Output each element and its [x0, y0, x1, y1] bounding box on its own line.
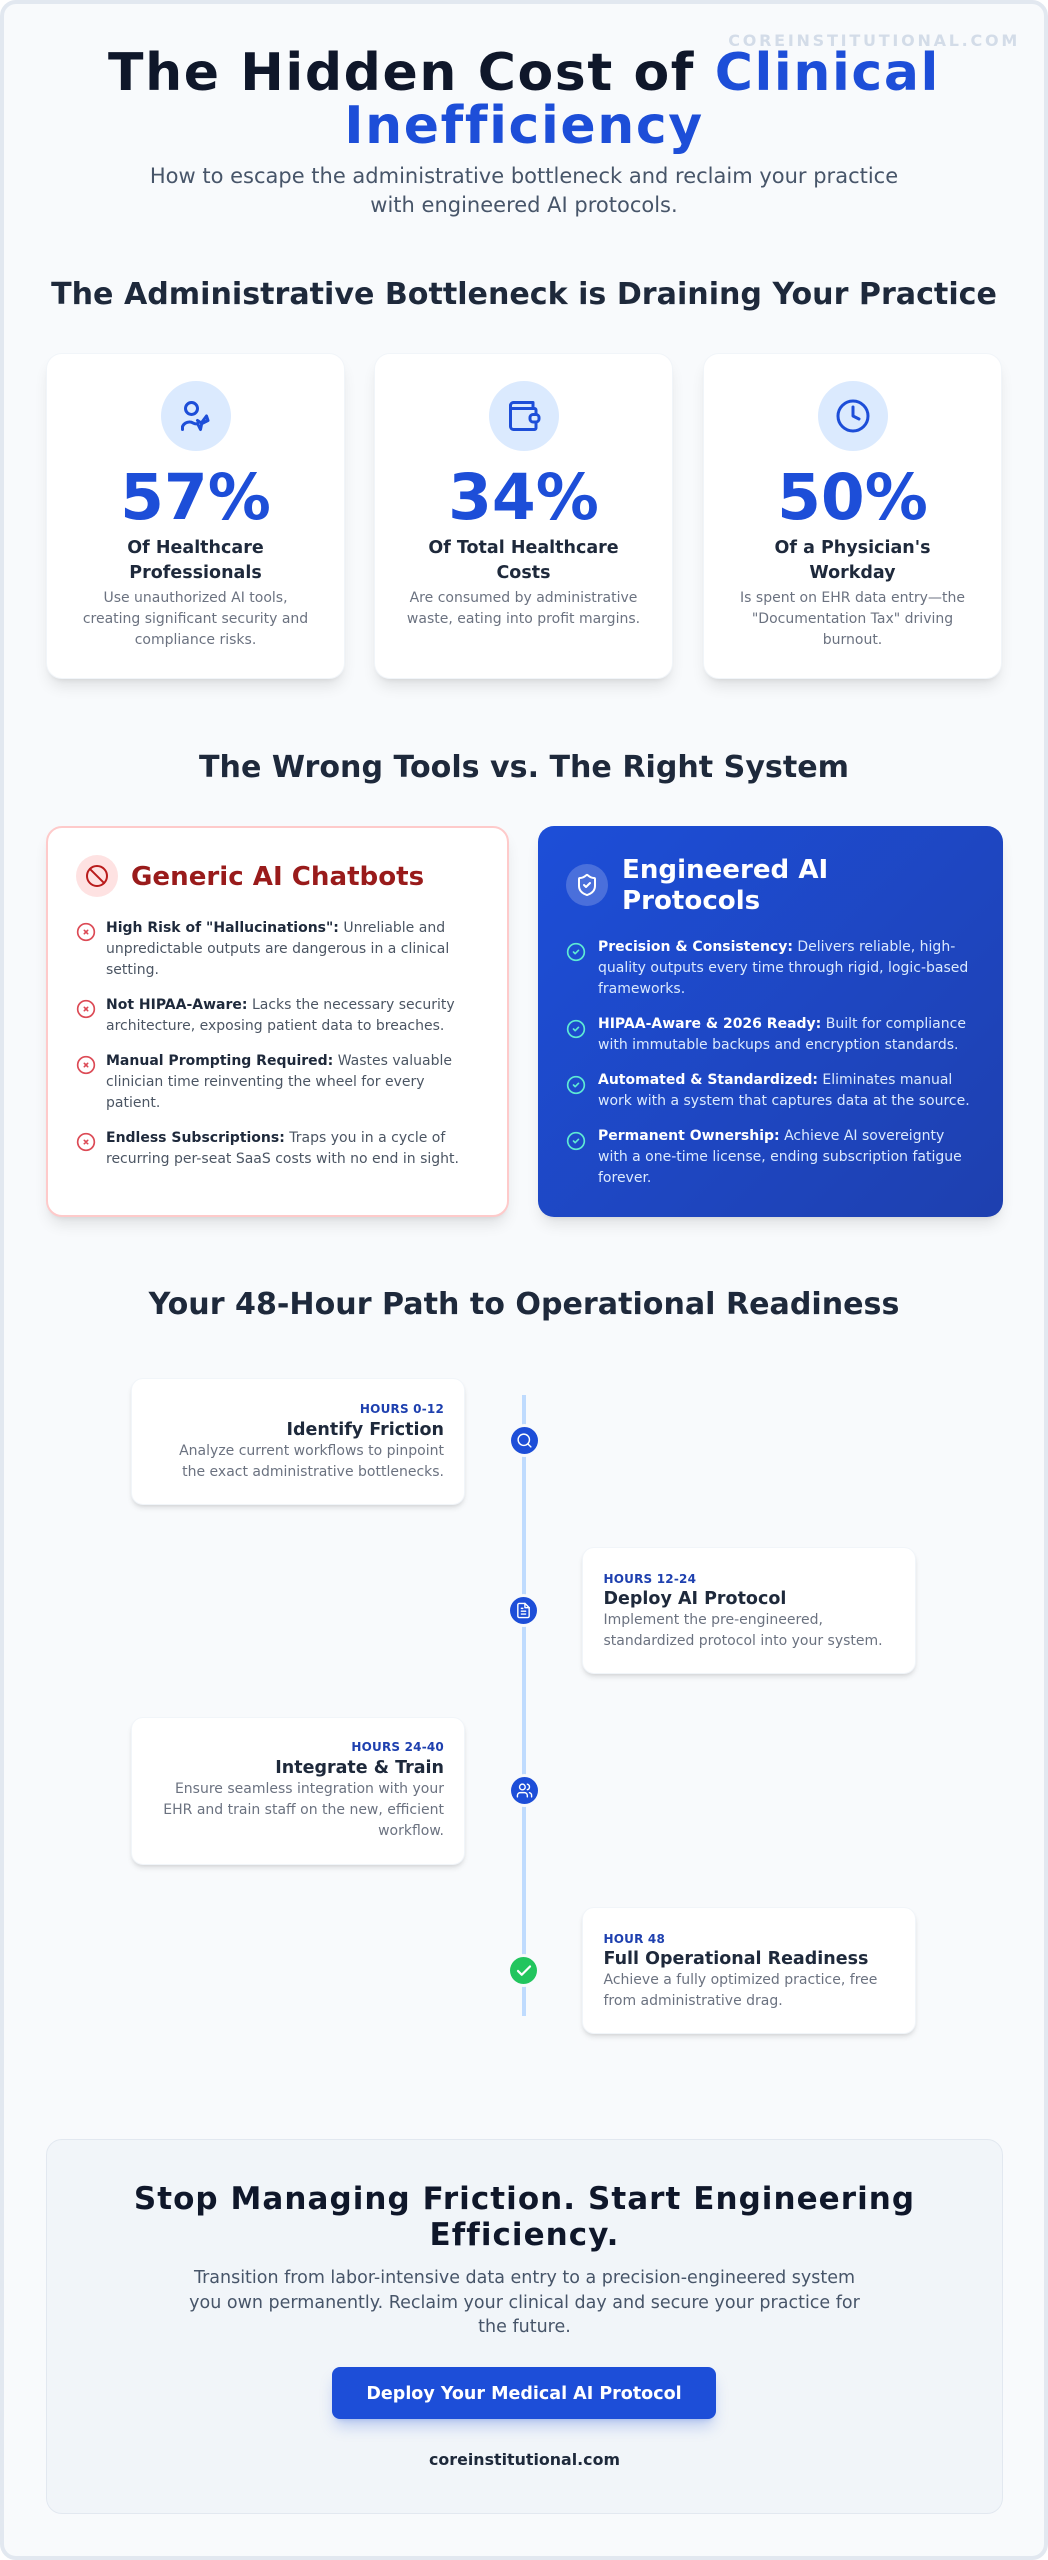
list item: HIPAA: Not HIPAA-Aware: Lacks the necessary security [106, 997, 455, 1013]
timeline card: hours 0-12: the exact administrative bottlenecks. [182, 1464, 444, 1480]
list item: HIPAA ready: HIPAA-Aware & 2026 Ready: Built for compliance [598, 1016, 966, 1032]
list item: hallucinations: unpredictable outputs are dangerous in a clinical [106, 941, 449, 957]
list item: precision [566, 939, 968, 997]
stat description [740, 590, 965, 648]
timeline card: hour 48 [582, 1907, 916, 2034]
timeline card: hours 12-24: HOURS 12-24 [604, 1572, 696, 1586]
stat card: 50% [703, 353, 1002, 679]
CTA text: you own permanently. Reclaim your clinical day and secure your practice for [189, 2292, 860, 2312]
CTA button [332, 2367, 716, 2419]
CTA text [189, 2268, 860, 2337]
step marker: search [511, 1427, 538, 1454]
icon: wallet [489, 381, 559, 451]
list item: subscriptions [76, 1130, 459, 1167]
subtitle [150, 164, 898, 217]
list item: manual prompting: patient. [106, 1095, 160, 1111]
title: Inefficiency [344, 96, 704, 156]
CTA text: Transition from labor-intensive data entry to a precision-engineered system [194, 2268, 855, 2288]
timeline card: hours 12-24: Implement the pre-engineered, [604, 1612, 823, 1628]
timeline card: hours 12-24 [582, 1547, 916, 1674]
step marker: document [510, 1597, 537, 1624]
panel heading: Protocols [622, 886, 760, 916]
panel: call to action [46, 2139, 1003, 2514]
list item: automated: Automated & Standardized: Eliminates manual [598, 1072, 952, 1088]
timeline card: hour 48: Achieve a fully optimized practice, free [604, 1972, 877, 1988]
stat description: "Documentation Tax" driving [752, 611, 953, 627]
stat label: Of a Physician's [774, 538, 930, 558]
timeline card: hour 48: Full Operational Readiness [604, 1949, 868, 1969]
list item: ownership: Permanent Ownership: Achieve AI sovereignty [598, 1128, 944, 1144]
list item: HIPAA ready [566, 1016, 966, 1053]
stat label [774, 538, 930, 582]
panel: engineered AI protocols [538, 826, 1003, 1217]
stat description [407, 590, 640, 627]
stat description: burnout. [823, 632, 882, 648]
stat description: compliance risks. [135, 632, 256, 648]
stat label [428, 538, 619, 582]
panel heading: Engineered AI [622, 855, 828, 885]
timeline card: hours 24-40: Ensure seamless integration with your [175, 1781, 444, 1797]
subtitle: How to escape the administrative bottleneck and reclaim your practice [150, 164, 898, 188]
timeline card: hours 24-40: EHR and train staff on the new, efficient [163, 1802, 444, 1818]
CTA heading: Stop Managing Friction. Start Engineering [134, 2181, 915, 2217]
timeline card: hours 0-12: HOURS 0-12 [360, 1402, 444, 1416]
heading: wrong tools vs right system: The Wrong Tools vs. The Right System [199, 750, 849, 784]
stat value: 57% [120, 461, 271, 534]
stat value: 50% [777, 461, 928, 534]
step marker: complete [510, 1957, 537, 1984]
list item: manual prompting: clinician time reinventing the wheel for every [106, 1074, 425, 1090]
timeline card: hours 0-12 [131, 1378, 465, 1505]
stat card: 34% [374, 353, 673, 679]
timeline card: hours 0-12: Identify Friction [286, 1420, 444, 1440]
list item: precision: quality outputs every time through rigid, logic-based [598, 960, 968, 976]
list item: HIPAA: architecture, exposing patient data to breaches. [106, 1018, 444, 1034]
list item: automated: work with a system that captures data at the source. [598, 1093, 970, 1109]
list item: HIPAA ready: with immutable backups and encryption standards. [598, 1037, 958, 1053]
timeline card: hours 24-40: HOURS 24-40 [351, 1740, 444, 1754]
list item: manual prompting [76, 1053, 452, 1111]
stat value: 34% [448, 461, 599, 534]
list item: hallucinations: setting. [106, 962, 159, 978]
CTA button: Deploy Your Medical AI Protocol [366, 2384, 682, 2404]
CTA website: coreinstitutional.com [429, 2450, 620, 2468]
timeline card: hour 48: HOUR 48 [604, 1932, 665, 1946]
step marker: team [511, 1777, 538, 1804]
stat description [83, 590, 308, 648]
list item: hallucinations [76, 920, 449, 978]
stat label: Professionals [129, 562, 262, 582]
stat description: Use unauthorized AI tools, [103, 590, 288, 606]
title [108, 42, 940, 156]
timeline card: hours 0-12: Analyze current workflows to pinpoint [179, 1443, 444, 1459]
list item: subscriptions: recurring per-seat SaaS costs with no end in sight. [106, 1151, 459, 1167]
list item: subscriptions: Endless Subscriptions: Traps you in a cycle of [106, 1130, 445, 1146]
timeline card: hours 12-24: standardized protocol into your system. [604, 1633, 883, 1649]
timeline card: hours 24-40 [131, 1717, 465, 1865]
stat label: Of Healthcare [127, 538, 264, 558]
stat description: waste, eating into profit margins. [407, 611, 640, 627]
CTA heading [134, 2181, 915, 2253]
heading: bottleneck: The Administrative Bottleneck is Draining Your Practice [51, 276, 997, 312]
list item: ownership [566, 1128, 962, 1186]
timeline line [522, 1395, 526, 2016]
panel: generic AI chatbots [46, 826, 509, 1217]
list item: precision: Precision & Consistency: Delivers reliable, high- [598, 939, 955, 955]
list item: automated [566, 1072, 970, 1109]
list item: hallucinations: High Risk of "Hallucinations": Unreliable and [106, 920, 445, 936]
panel heading: Generic AI Chatbots [131, 862, 424, 892]
stat label: Of Total Healthcare [428, 538, 619, 558]
subtitle: with engineered AI protocols. [370, 193, 678, 217]
timeline card: hours 12-24: Deploy AI Protocol [604, 1589, 786, 1609]
timeline card: hours 24-40: workflow. [378, 1823, 444, 1839]
icon: clock [818, 381, 888, 451]
title: The Hidden Cost of Clinical [108, 42, 940, 102]
stat description: creating significant security and [83, 611, 308, 627]
timeline [130, 1390, 917, 2038]
timeline card: hours 24-40: Integrate & Train [275, 1758, 444, 1778]
stat label [127, 538, 264, 582]
icon: user with check [161, 381, 231, 451]
timeline card: hour 48: from administrative drag. [604, 1993, 783, 2009]
stat label: Workday [809, 562, 896, 582]
stat description: Is spent on EHR data entry—the [740, 590, 965, 606]
stat card: 57% [46, 353, 345, 679]
icon: shield check [566, 864, 608, 906]
list item: manual prompting: Manual Prompting Required: Wastes valuable [106, 1053, 452, 1069]
watermark: COREINSTITUTIONAL.COM [728, 31, 1020, 50]
CTA heading: Efficiency. [430, 2217, 619, 2253]
heading: 48-hour path: Your 48-Hour Path to Operational Readiness [149, 1286, 899, 1322]
stat description: Are consumed by administrative [410, 590, 637, 606]
panel heading [622, 855, 828, 916]
CTA text: the future. [478, 2317, 571, 2337]
stat label: Costs [496, 562, 551, 582]
icon: prohibited [76, 855, 118, 897]
list item: precision: frameworks. [598, 981, 685, 997]
list item: HIPAA [76, 997, 455, 1034]
list item: ownership: forever. [598, 1170, 651, 1186]
list item: ownership: with a one-time license, ending subscription fatigue [598, 1149, 962, 1165]
